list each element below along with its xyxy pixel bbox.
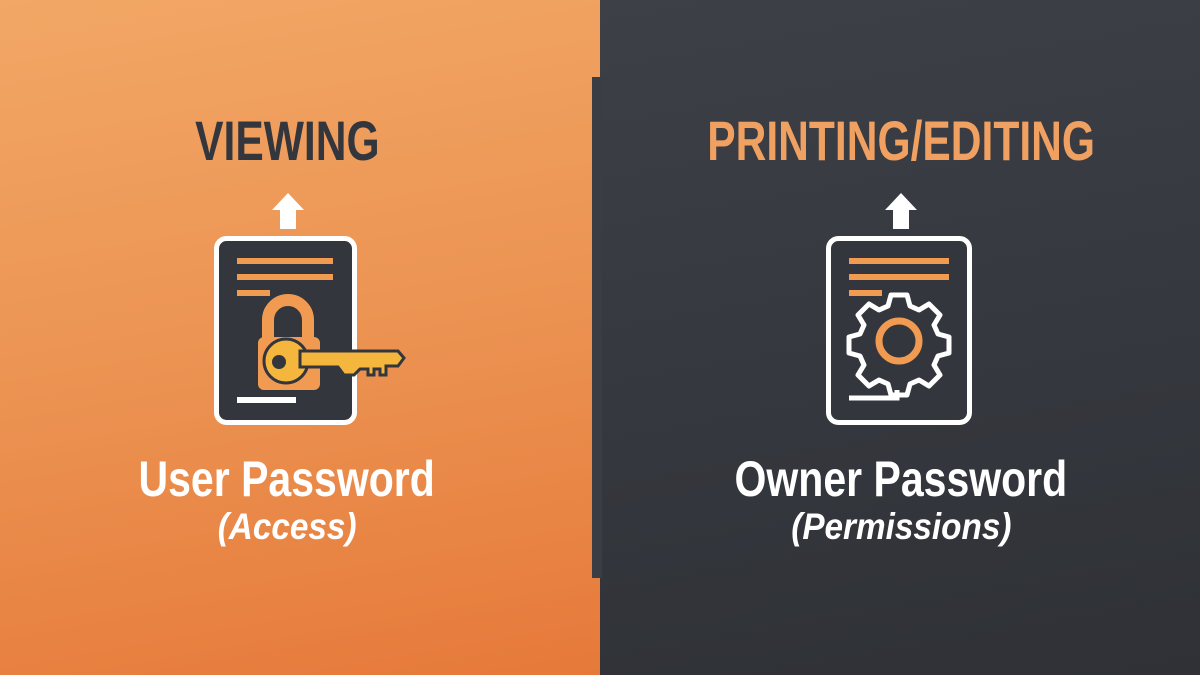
heading: printing/editing: PRINTING/EDITING (707, 109, 1095, 172)
text: permissions: (Permissions) (791, 506, 1011, 547)
icon: gear document (826, 193, 972, 425)
divider notch (592, 77, 602, 578)
text: user password: User Password (139, 451, 435, 507)
panel: right dark background (600, 0, 1200, 675)
icon: locked document with key (214, 193, 406, 425)
text: access: (Access) (218, 506, 356, 547)
heading: viewing: VIEWING (195, 109, 379, 172)
text: owner password: Owner Password (735, 451, 1067, 507)
panel: left orange background (0, 0, 600, 675)
